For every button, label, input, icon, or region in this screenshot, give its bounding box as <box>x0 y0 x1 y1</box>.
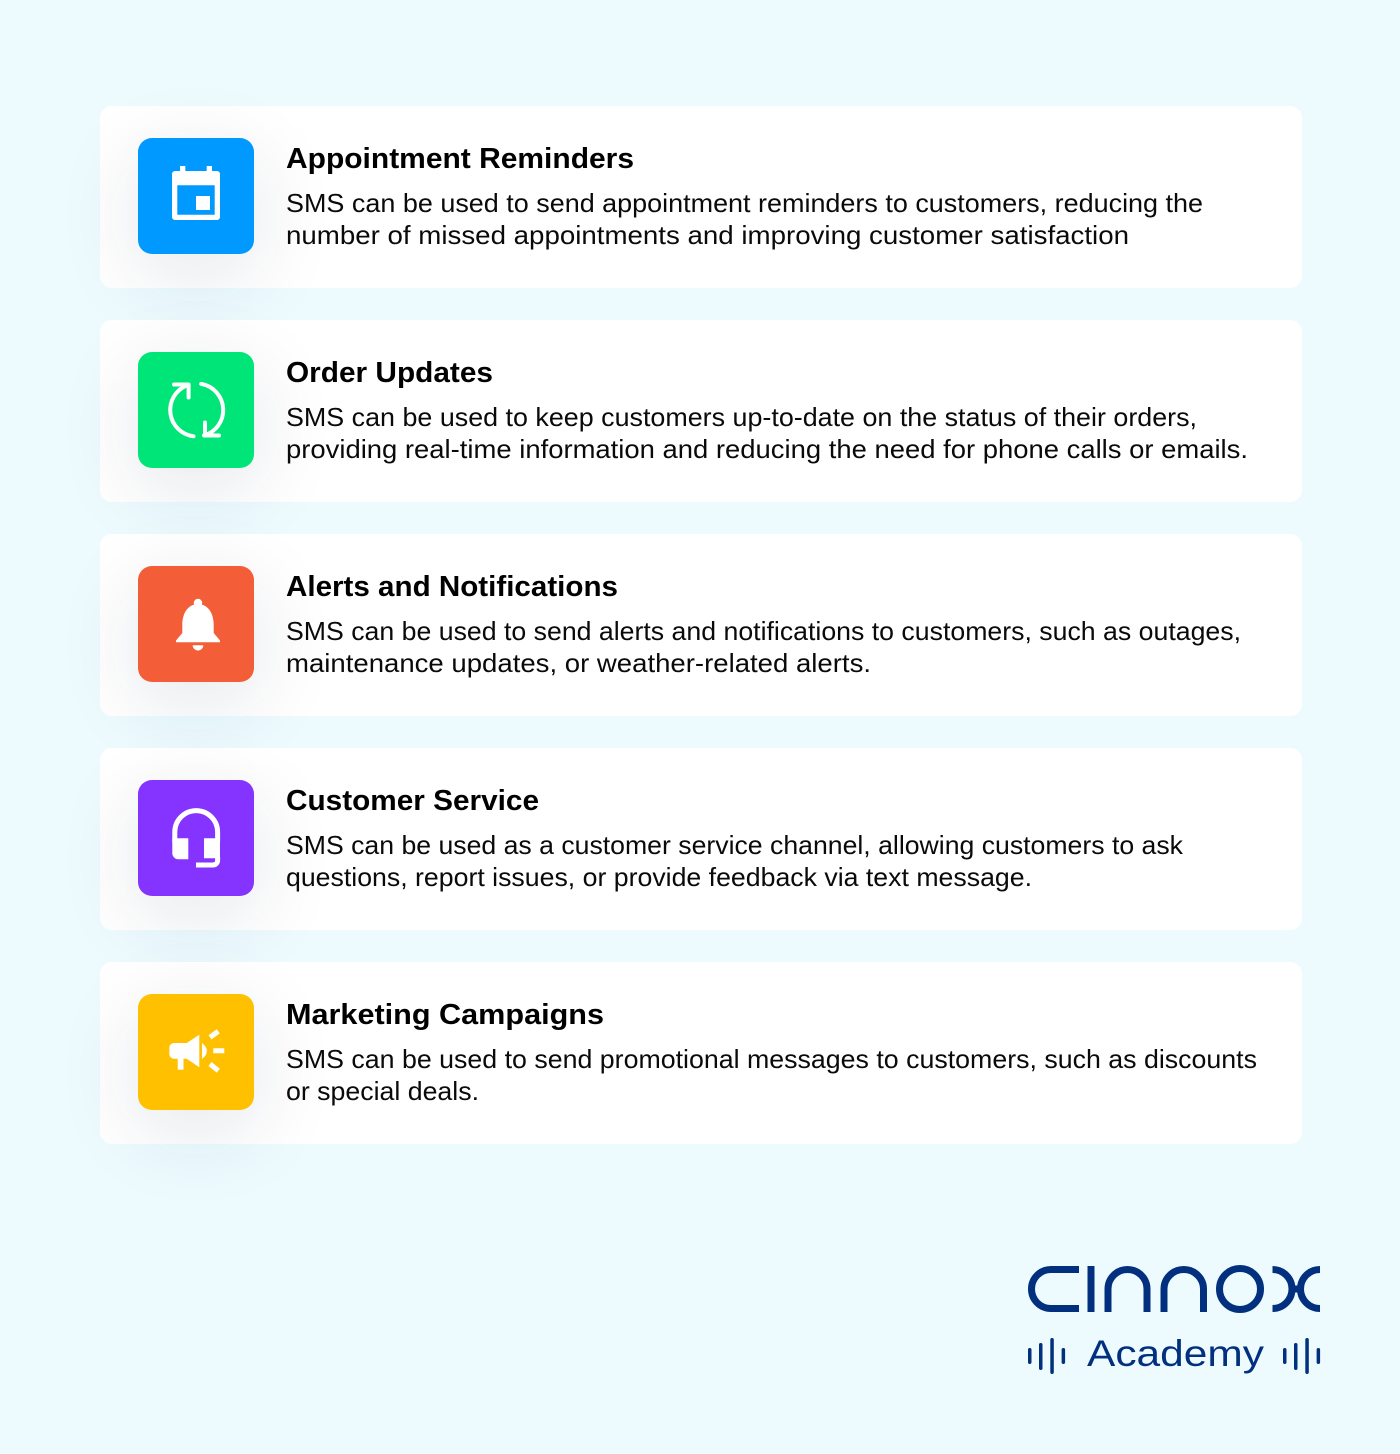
panel: marketing campaigns <box>100 962 1302 1144</box>
panel: customer service <box>100 748 1302 930</box>
description: maintenance updates, or weather-related alerts. <box>286 648 871 678</box>
description: SMS can be used to send appointment reminders to customers, reducing the <box>286 188 1203 218</box>
text: customer service <box>286 785 1184 892</box>
description <box>286 402 1248 464</box>
icon: calendar <box>138 138 254 254</box>
description: SMS can be used as a customer service channel, allowing customers to ask <box>286 830 1184 860</box>
description: SMS can be used to send promotional messages to customers, such as discounts <box>286 1044 1257 1074</box>
heading: Order Updates <box>286 357 493 389</box>
icon: megaphone <box>138 994 254 1110</box>
panel: appointment reminders <box>100 106 1302 288</box>
description: number of missed appointments and improving customer satisfaction <box>286 220 1129 250</box>
left sound wave <box>1028 1338 1065 1374</box>
panel: alerts and notifications <box>100 534 1302 716</box>
icon: headset <box>138 780 254 896</box>
text: alerts and notifications <box>286 571 1241 678</box>
description: SMS can be used to send alerts and notifications to customers, such as outages, <box>286 616 1241 646</box>
logo: cinnox academy <box>1028 1265 1320 1374</box>
logo wordmark <box>1032 1266 1320 1312</box>
heading: Alerts and Notifications <box>286 571 618 603</box>
heading: Customer Service <box>286 785 539 817</box>
description: providing real-time information and reducing the need for phone calls or emails. <box>286 434 1248 464</box>
panel: order updates <box>100 320 1302 502</box>
icon: bell <box>138 566 254 682</box>
text: appointment reminders <box>286 143 1203 250</box>
academy label: Academy <box>1087 1333 1265 1374</box>
text: marketing campaigns <box>286 999 1257 1106</box>
right sound wave <box>1283 1338 1320 1374</box>
heading: Marketing Campaigns <box>286 999 604 1031</box>
description <box>286 1044 1257 1106</box>
heading: Appointment Reminders <box>286 143 634 175</box>
description <box>286 616 1241 678</box>
description: questions, report issues, or provide feedback via text message. <box>286 862 1032 892</box>
text: order updates <box>286 357 1248 464</box>
description: SMS can be used to keep customers up-to-date on the status of their orders, <box>286 402 1197 432</box>
icon: refresh arrows <box>138 352 254 468</box>
description <box>286 830 1184 892</box>
description <box>286 188 1203 250</box>
description: or special deals. <box>286 1076 479 1106</box>
